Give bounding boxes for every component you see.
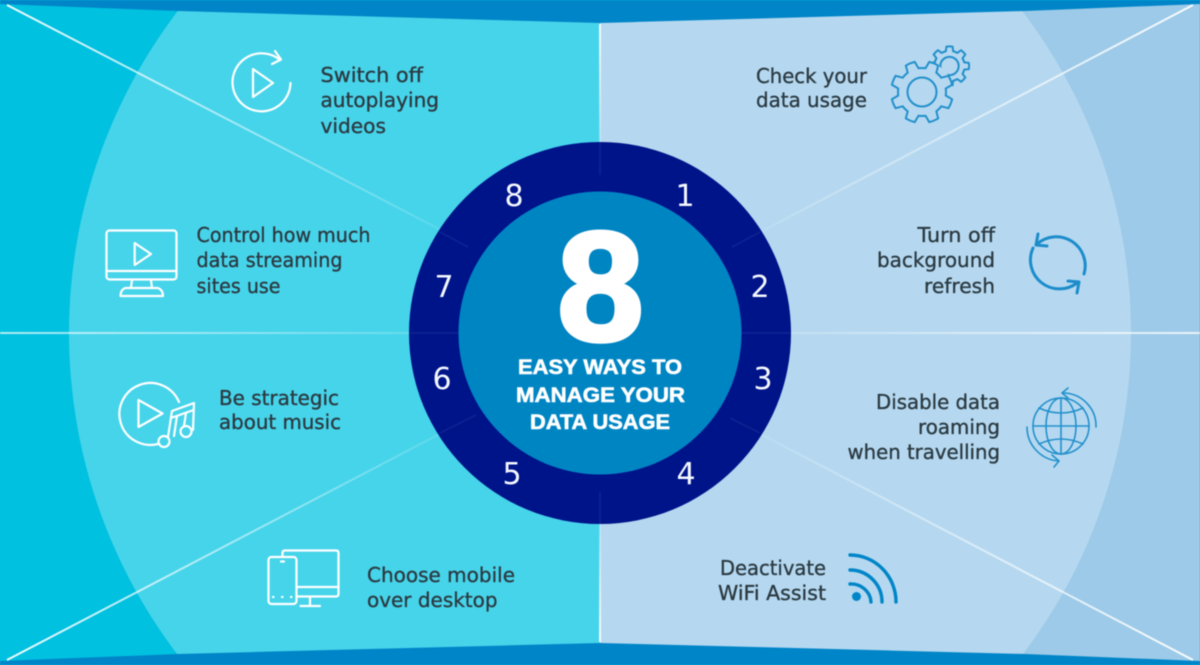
badge caption: DATA USAGE (530, 411, 670, 434)
item: check your data usage (756, 46, 969, 133)
text: Be strategic (219, 386, 339, 410)
ring numbers: 4 (676, 457, 696, 492)
text: videos (320, 114, 386, 138)
text: Choose mobile (367, 563, 515, 587)
ring numbers: 3 (753, 362, 773, 397)
text: when travelling (848, 440, 1000, 464)
ring numbers: 8 (504, 179, 524, 214)
item: be strategic about music (119, 383, 341, 447)
background: right outer panel (600, 0, 1200, 665)
item: switch off autoplaying videos (233, 51, 439, 138)
text: roaming (918, 415, 1000, 439)
ring numbers: 7 (434, 270, 454, 305)
panel: right inner circle half (600, 0, 1131, 665)
icon: monitor play (106, 230, 176, 296)
inner disc (458, 192, 742, 474)
text: sites use (196, 274, 280, 298)
ring numbers: 1 (675, 179, 695, 214)
badge caption (516, 356, 685, 434)
text (848, 390, 1000, 464)
panel: left inner circle half (69, 0, 600, 665)
icon: globe (1027, 388, 1096, 467)
text: Control how much (196, 223, 370, 247)
text: Switch off (320, 63, 424, 87)
bottom band (0, 643, 1200, 665)
text: refresh (924, 274, 995, 298)
text (196, 223, 370, 298)
ring numbers: 5 (502, 457, 522, 492)
text (877, 223, 996, 298)
text: Disable data (876, 390, 1000, 414)
text (367, 563, 515, 612)
text (219, 386, 341, 434)
icon: wifi (850, 555, 896, 602)
text: Turn off (916, 223, 996, 247)
outer ring (409, 142, 791, 524)
text: background (877, 248, 995, 272)
icon: gears (881, 46, 969, 133)
text (718, 556, 826, 605)
icon: refresh arrows (1030, 234, 1085, 293)
ring numbers: 6 (432, 362, 452, 397)
text: over desktop (367, 588, 498, 612)
text (320, 63, 439, 138)
icon: phone and monitor (268, 550, 338, 606)
item: choose mobile over desktop (268, 550, 515, 612)
text: data streaming (196, 248, 342, 272)
text: Deactivate (720, 556, 826, 580)
text: autoplaying (320, 88, 439, 112)
item: control streaming (106, 223, 370, 298)
text (756, 64, 868, 112)
text: WiFi Assist (718, 581, 826, 605)
icon: replay play circle (233, 51, 290, 111)
item: turn off background refresh (877, 223, 1085, 298)
icon: disc with music note (119, 383, 194, 447)
badge caption: EASY WAYS TO (518, 356, 682, 379)
text: about music (219, 410, 341, 434)
text: Check your (756, 64, 868, 88)
ring numbers: 2 (750, 270, 770, 305)
top band (0, 0, 1200, 23)
text: data usage (756, 88, 867, 112)
background: left outer panel (0, 0, 600, 665)
badge caption: MANAGE YOUR (516, 384, 685, 407)
ring numbers (432, 179, 773, 492)
center badge (409, 142, 791, 524)
item: disable data roaming (848, 388, 1096, 467)
item: deactivate wifi assist (718, 555, 896, 605)
big number 8: 8 (557, 200, 644, 373)
